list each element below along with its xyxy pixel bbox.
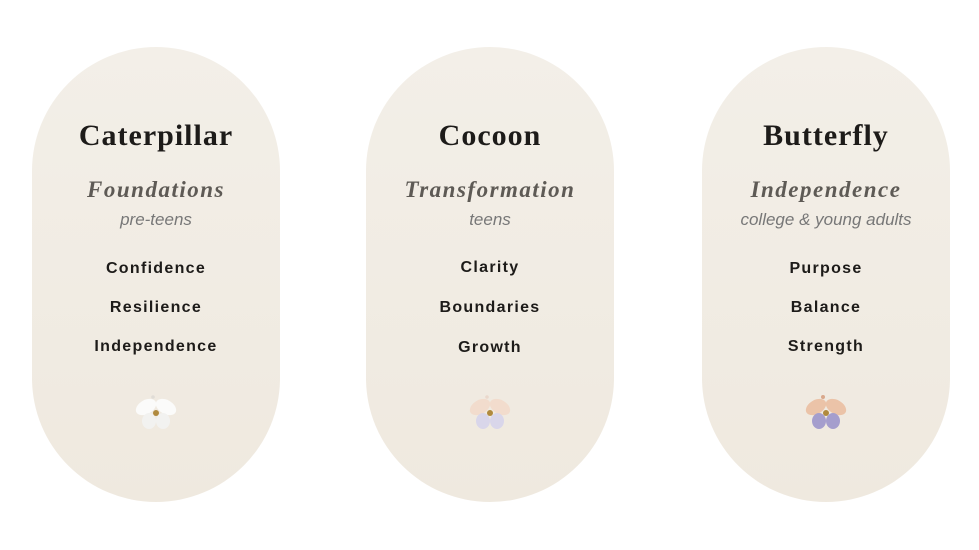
panel: caterpillar bbox=[32, 47, 280, 502]
item: Confidence bbox=[106, 260, 206, 277]
heading: Butterfly bbox=[763, 119, 889, 152]
item: Clarity bbox=[461, 259, 519, 276]
item: Growth bbox=[458, 339, 522, 356]
heading: Caterpillar bbox=[79, 119, 233, 152]
item: Strength bbox=[788, 338, 864, 355]
item: Balance bbox=[791, 299, 861, 316]
subtitle: Foundations bbox=[87, 177, 225, 202]
age: teens bbox=[469, 210, 511, 229]
item: Independence bbox=[94, 338, 218, 355]
item: Resilience bbox=[110, 299, 202, 316]
icon: butterfly bbox=[136, 396, 176, 429]
age: college & young adults bbox=[740, 210, 912, 229]
age: pre-teens bbox=[120, 210, 192, 229]
subtitle: Independence bbox=[751, 177, 901, 202]
item: Purpose bbox=[789, 260, 863, 277]
icon: butterfly bbox=[470, 395, 510, 429]
panel: cocoon bbox=[366, 47, 614, 502]
icon: butterfly bbox=[806, 395, 846, 429]
item: Boundaries bbox=[439, 299, 540, 316]
heading: Cocoon bbox=[439, 119, 541, 152]
subtitle: Transformation bbox=[405, 177, 575, 202]
panel: butterfly bbox=[702, 47, 950, 502]
